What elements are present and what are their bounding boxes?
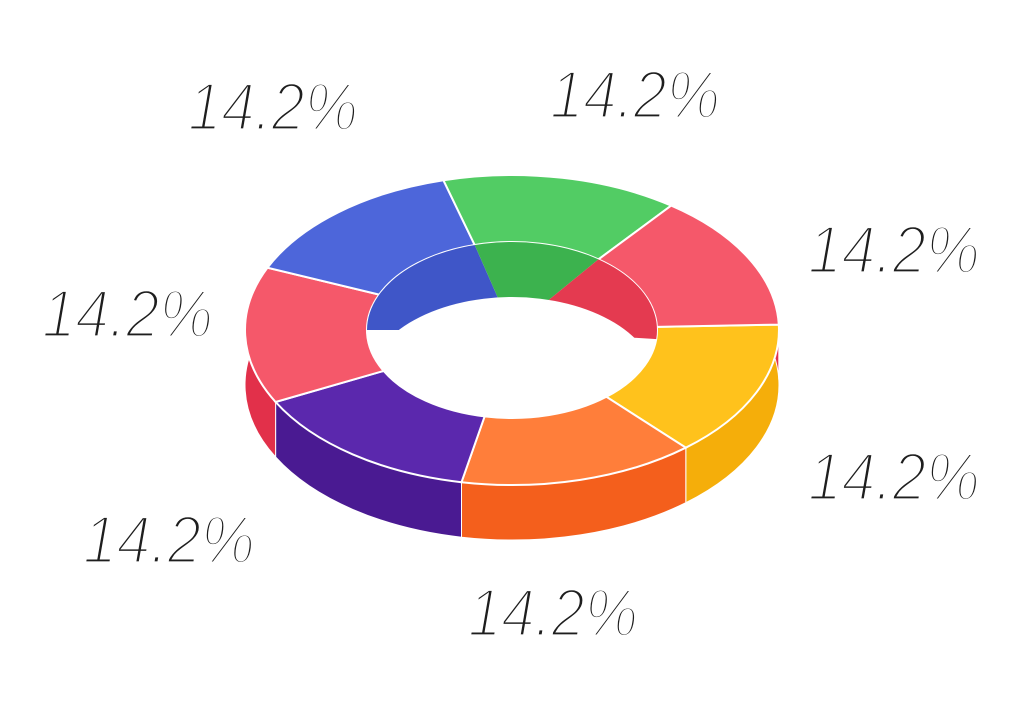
label top-left: 14.2% bbox=[188, 69, 358, 145]
donut chart bbox=[245, 175, 779, 540]
label bottom: 14.2% bbox=[468, 575, 638, 651]
label right lower: 14.2% bbox=[808, 439, 980, 515]
top faces bbox=[245, 175, 779, 485]
outer walls bbox=[245, 206, 779, 540]
label right upper: 14.2% bbox=[808, 212, 980, 288]
label top: 14.2% bbox=[550, 57, 720, 133]
label bottom-left: 14.2% bbox=[83, 502, 255, 578]
inner hole bbox=[367, 242, 657, 340]
label left: 14.2% bbox=[42, 276, 213, 352]
